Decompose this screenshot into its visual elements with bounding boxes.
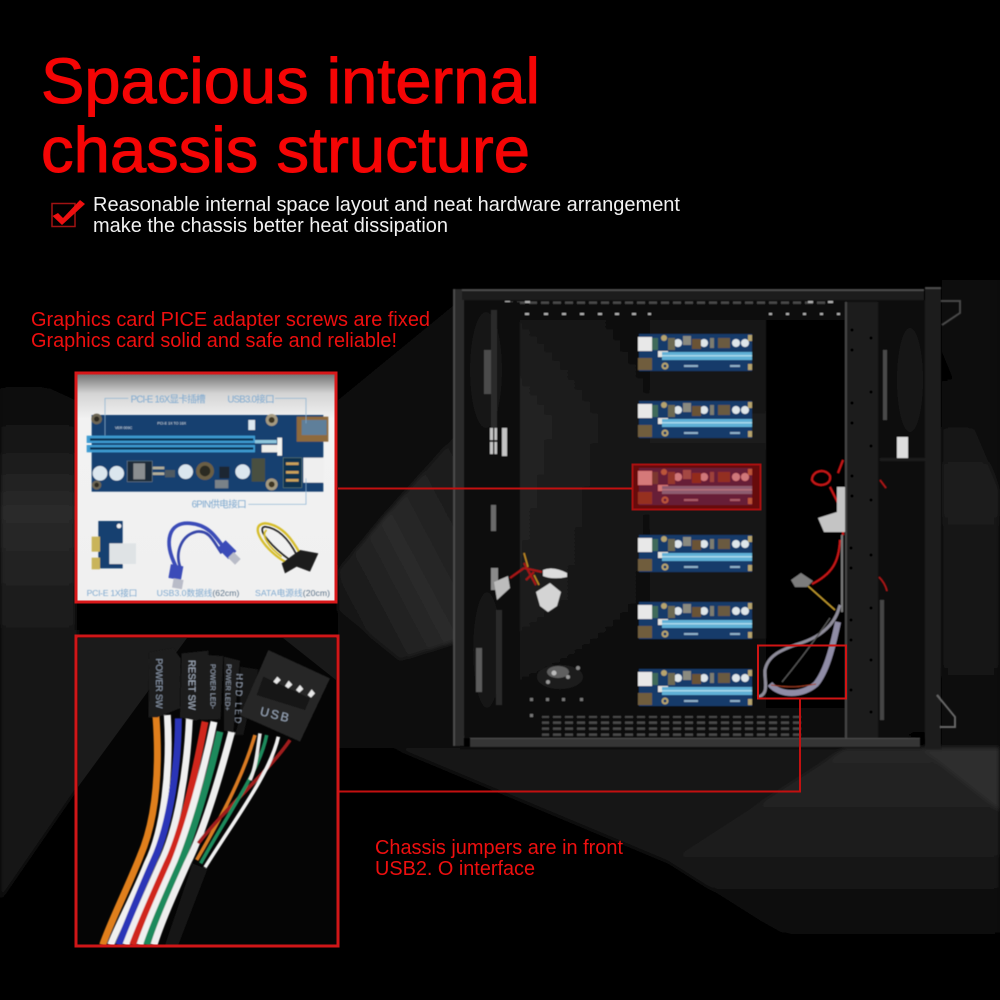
highlight: front jumper cables	[758, 646, 846, 698]
screw pile	[537, 665, 583, 689]
right cable bay	[766, 320, 848, 720]
black cable sleeve	[165, 863, 207, 945]
title: Spacious internal	[41, 45, 540, 117]
riser board: VER 009C	[115, 426, 133, 430]
red callout: graphics card adapter: Graphics card PICE adapter screws are fixed	[31, 309, 430, 331]
board callouts: USB3.0接口	[227, 393, 275, 405]
connector line: riser	[338, 488, 632, 490]
red callout: chassis jumpers: Chassis jumpers are in front	[375, 837, 623, 859]
bottom captions: SATA电源线(20cm)	[255, 587, 330, 598]
SATA power cable	[258, 523, 318, 573]
single pin connectors	[148, 648, 258, 735]
bottom captions: PCI-E 1X接口	[87, 587, 137, 598]
left fans	[464, 302, 520, 722]
raised riser mounting plate	[650, 320, 766, 720]
red callout: graphics card adapter	[31, 309, 430, 352]
bottom captions	[87, 587, 330, 598]
single pin connectors: HDD LED	[233, 673, 245, 724]
power connectors	[818, 487, 845, 532]
interior shading	[520, 320, 766, 720]
ribbon cable	[758, 605, 840, 697]
USB header connector: USB	[259, 704, 290, 725]
board callouts	[131, 393, 275, 511]
chassis photo	[453, 287, 960, 749]
board callouts: 6PIN供电接口	[192, 499, 247, 511]
USB3.0 cable	[168, 523, 241, 589]
floor perforations	[464, 698, 848, 738]
USB header connector	[240, 650, 330, 742]
front panel wires	[103, 715, 232, 945]
chassis interior back wall	[464, 300, 926, 738]
riser board: PCI-E 1X TO 16X	[157, 421, 187, 425]
USB header wires	[197, 733, 290, 867]
panel: PCI-E riser kit photo	[76, 373, 336, 602]
right cables and ribbon	[758, 460, 845, 697]
title	[41, 45, 540, 186]
1X adapter board	[92, 521, 136, 569]
chassis frame	[453, 287, 941, 749]
intro text: Reasonable internal space layout and neat hardware arrangement	[93, 194, 680, 216]
red callout: graphics card adapter: Graphics card solid and safe and reliable!	[31, 330, 397, 352]
single pin connectors: POWER LED+	[223, 664, 232, 711]
red wire tangle	[812, 460, 843, 584]
single pin connectors: POWER LED-	[209, 664, 216, 710]
handles	[937, 301, 960, 727]
single pin connectors: RESET SW	[185, 660, 196, 711]
riser board	[87, 414, 328, 492]
highlight: selected riser	[632, 464, 760, 510]
single pin connectors: POWER SW	[154, 658, 164, 709]
title: chassis structure	[41, 114, 530, 186]
intro text	[93, 194, 680, 237]
panel: front jumper cable photo	[76, 636, 338, 946]
partition column	[845, 302, 878, 738]
red callout: chassis jumpers: USB2. O interface	[375, 858, 535, 880]
right fans	[879, 302, 926, 732]
connector line: jumpers	[338, 698, 800, 792]
left power connectors and wires	[494, 553, 567, 612]
intro text: make the chassis better heat dissipation	[93, 215, 448, 237]
board callouts: PCI-E 16X显卡插槽	[131, 393, 206, 405]
leader lines	[105, 398, 306, 504]
icon: red check mark	[52, 200, 85, 226]
six PCI-E risers	[638, 334, 752, 706]
top perforations	[464, 300, 926, 320]
bottom captions: USB3.0数据线(62cm)	[157, 587, 239, 598]
red callout: chassis jumpers	[375, 837, 623, 880]
